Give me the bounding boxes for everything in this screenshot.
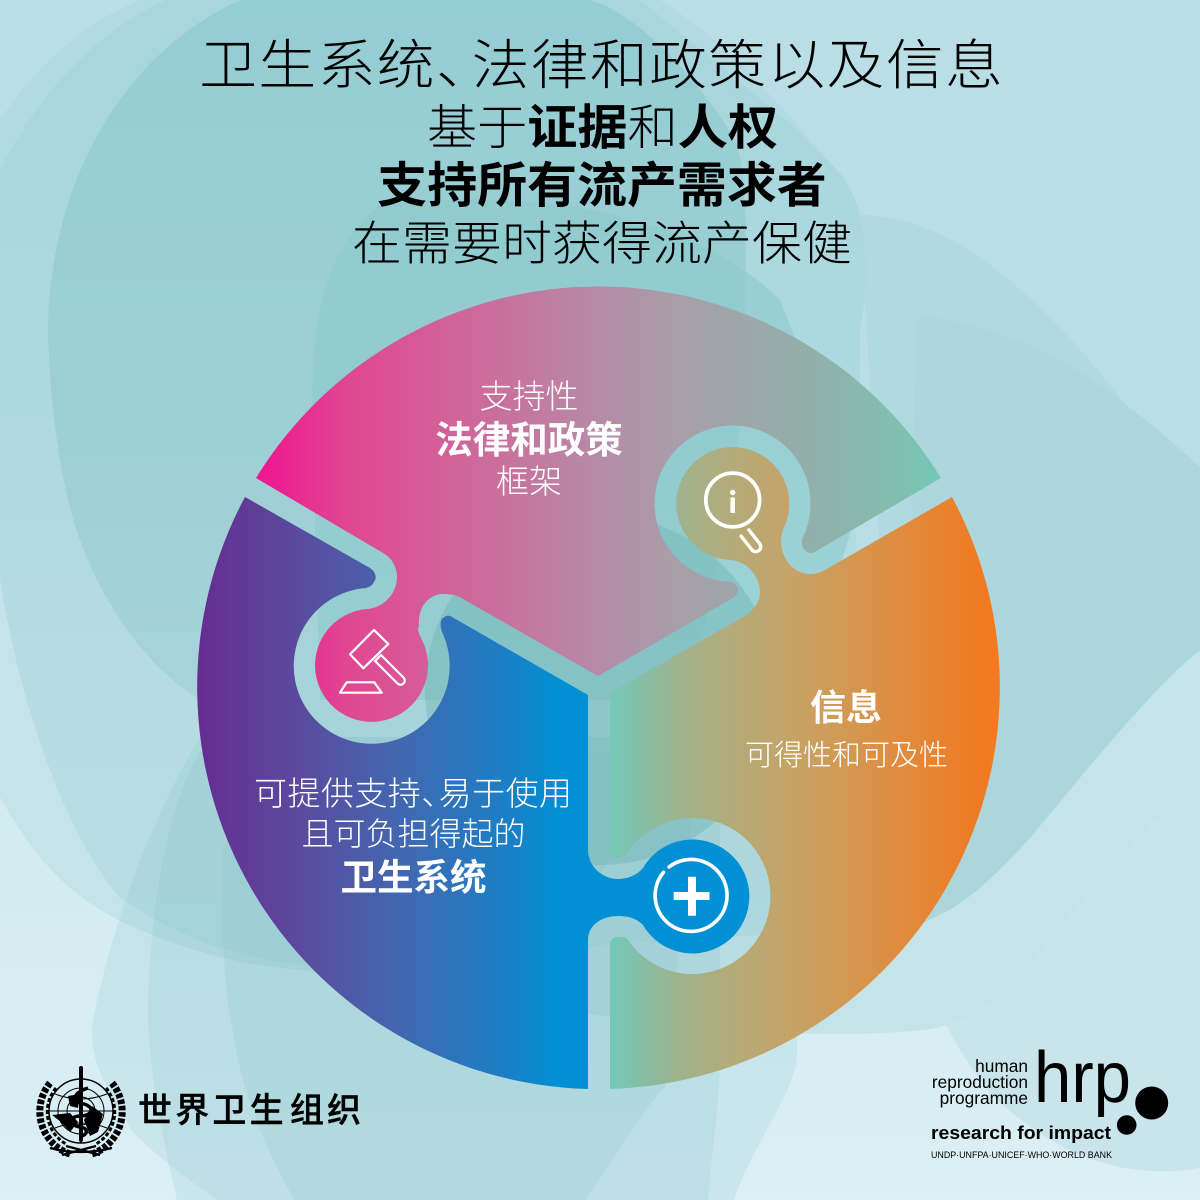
logo: HRP: research for impact [931, 1122, 1111, 1143]
logo: HRP: programme [940, 1088, 1028, 1108]
text: legal frameworks: 法律和政策 [435, 419, 623, 461]
logo: HRP: UNDP·UNFPA·UNICEF·WHO·WORLD BANK [931, 1149, 1113, 1160]
text: health systems: 可提供支持、易于使用 [254, 775, 572, 812]
text: health systems [254, 775, 572, 898]
organisation name: 世界卫生组织 [138, 1092, 364, 1130]
text: information [745, 687, 948, 772]
text: legal frameworks [435, 378, 623, 500]
title line 4: 在需要时获得流产保健 [352, 218, 852, 271]
logo: HRP: hrp [1034, 1038, 1131, 1118]
logo: HRP [931, 1038, 1168, 1160]
text: information: 可得性和可及性 [745, 739, 948, 772]
title line 2: 基于证据和人权 [427, 102, 778, 155]
panel: legal and policy frameworks [256, 286, 941, 722]
panel: health systems [197, 497, 749, 1089]
icon: medical plus [655, 859, 727, 931]
puzzle circle [197, 286, 1000, 1089]
emblem [40, 1068, 122, 1155]
title line 1: 卫生系统、法律和政策以及信息 [199, 35, 1003, 96]
title [199, 35, 1003, 271]
icon: gavel [340, 630, 405, 693]
text: legal frameworks: 支持性 [480, 378, 578, 415]
panel: information [610, 447, 1000, 1089]
logo: HRP: reproduction [932, 1072, 1028, 1092]
text: health systems: 卫生系统 [340, 857, 486, 898]
logo: WHO [40, 1068, 364, 1155]
text: legal frameworks: 框架 [496, 463, 562, 500]
text: information: 信息 [810, 687, 882, 728]
icon: magnifier with i [706, 473, 761, 552]
title line 3: 支持所有流产需求者 [377, 159, 827, 213]
text: health systems: 且可负担得起的 [301, 816, 526, 852]
logo: HRP: human [975, 1056, 1028, 1076]
